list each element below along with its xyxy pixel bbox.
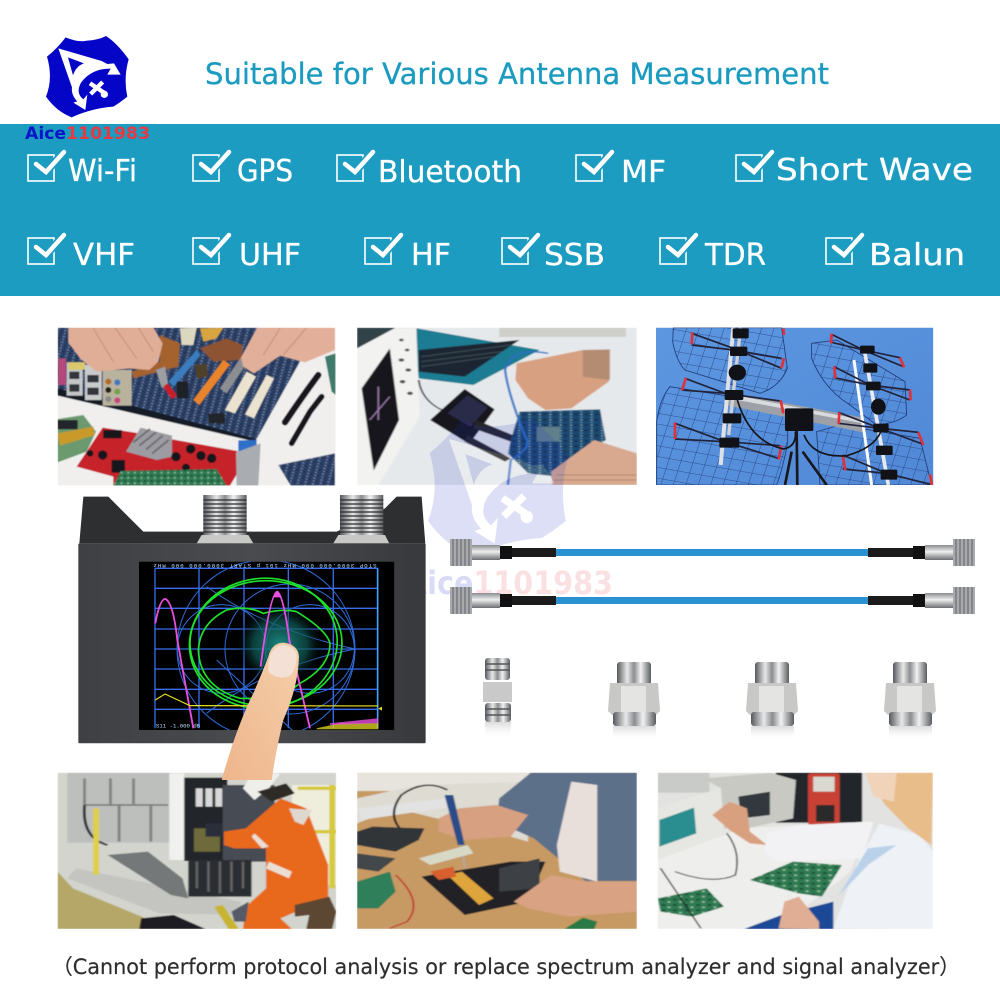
item: MF [576,152,666,190]
red dipole tips [675,328,932,485]
device: NanoVNA analyzer [78,495,426,747]
device front case [78,543,426,743]
panel: antenna type banner [0,124,1000,296]
item: Wi-Fi [28,152,137,189]
antenna balun blocks [719,328,897,480]
item: SSB: SSB [544,238,605,273]
item: VHF: VHF [73,238,135,273]
item: Wi-Fi: Wi-Fi [68,154,137,189]
tripod [785,430,827,485]
watermark shield [428,418,568,556]
photo: grid antennas against sky [656,328,933,485]
item: HF: HF [411,238,451,273]
item: Bluetooth: Bluetooth [378,155,522,190]
item: TDR [660,235,766,273]
banner background [0,124,1000,296]
device rear housing [79,497,425,543]
item: Balun: Balun [869,238,965,273]
item: TDR: TDR [704,238,766,273]
photo: testing a circuit board with the analyzer [357,328,637,485]
logo shield [46,36,129,117]
coax cables [737,400,881,456]
item: VHF [28,235,135,273]
photo: technician at electrical cabinet [57,773,336,929]
photo: engineer at lab bench [658,773,933,929]
item: UHF [193,235,301,273]
item: SSB [502,235,605,273]
touch screen [139,560,394,747]
item: HF [365,235,451,273]
left N connector [197,495,253,543]
adapter: calibration load 1 [608,662,660,740]
dipole elements [675,333,930,484]
horizontal boom [725,392,863,432]
item: GPS [193,152,293,189]
right N connector [333,495,389,543]
adapter: calibration load 3 [884,662,936,740]
photo: soldering a circuit board [357,773,637,929]
adapter: calibration load 2 [746,662,798,740]
photo: motherboard repair [58,328,336,486]
logo [25,36,150,144]
watermark text: Aice1101983 [405,564,613,602]
caption: （Cannot perform protocol analysis or replace spectrum analyzer and signal analyzer） [52,955,960,979]
watermark: shield and text [405,418,613,602]
icon: finger touching screen [222,643,299,780]
antenna mesh reflectors [657,328,932,485]
item: Balun [826,235,965,273]
item: MF: MF [621,155,666,190]
screen status text bottom: S11 -1.000 dB [156,722,201,729]
vertical antenna masts [721,328,888,485]
screen status text top: STOP 3000.000 000 MHz 101 p START 3000.000 000 MHz [153,562,377,569]
cable: lower RF cable [450,587,975,614]
item: UHF: UHF [239,238,301,273]
adapter: N double connector [483,658,512,738]
item: GPS: GPS [237,154,293,189]
cable: upper RF cable [450,539,975,566]
title: Suitable for Various Antenna Measurement [205,57,829,91]
logo text: Aice1101983 [25,124,150,144]
item: Short Wave: Short Wave [776,153,973,188]
